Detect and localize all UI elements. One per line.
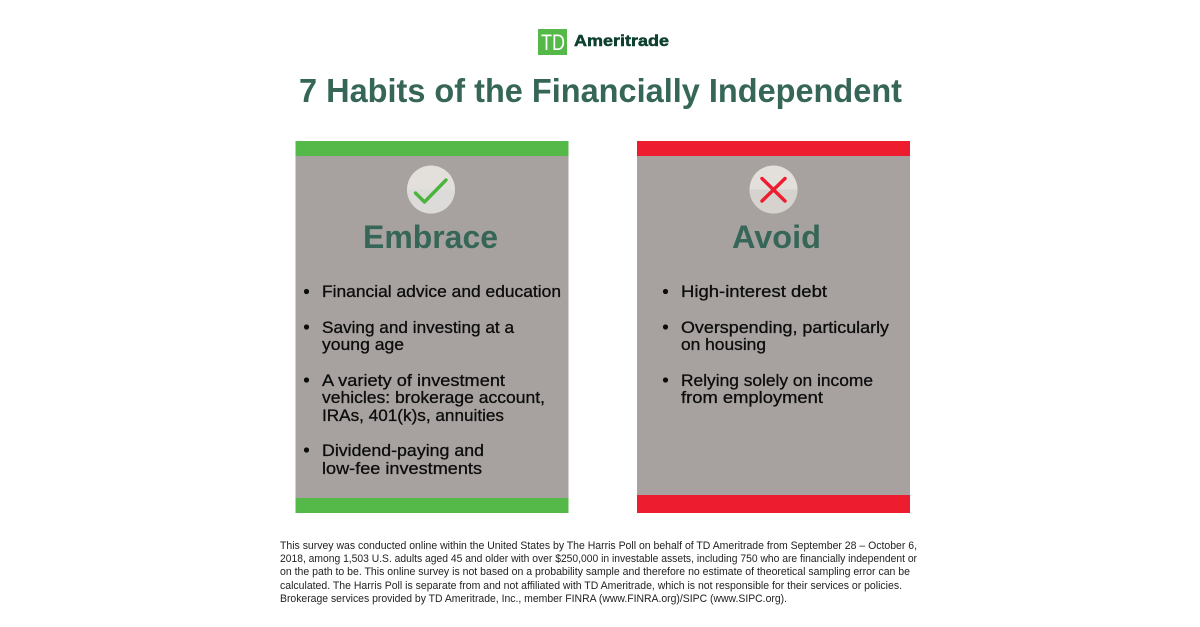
list: embrace items: Financial advice and education xyxy=(322,282,561,301)
list: embrace items: young age xyxy=(322,335,404,354)
list: avoid items: Overspending, particularly xyxy=(681,318,890,337)
panel: avoid xyxy=(637,141,910,513)
footnote: on the path to be. This online survey is not based on a probability sample and therefore no estimate of theoretical sampling error can be xyxy=(280,566,910,578)
heading: embrace: Embrace xyxy=(363,219,498,255)
logo: TD Ameritrade: TD xyxy=(541,30,565,55)
footnote: calculated. The Harris Poll is separate from and not affiliated with TD Ameritrade, which is not responsible for their services or policies. xyxy=(280,580,902,592)
footnote: Brokerage services provided by TD Ameritrade, Inc., member FINRA (www.FINRA.org)/SIPC (www.SIPC.org). xyxy=(280,593,787,605)
list: embrace items: A variety of investment xyxy=(322,371,505,390)
list: avoid items: Relying solely on income xyxy=(681,371,873,390)
icon: check mark xyxy=(407,166,455,214)
list: embrace items: IRAs, 401(k)s, annuities xyxy=(322,406,504,425)
list: embrace items: low-fee investments xyxy=(322,459,482,478)
list: avoid items: on housing xyxy=(681,335,766,354)
footnote: This survey was conducted online within the United States by The Harris Poll on behalf of TD Ameritrade from September 28 – October 6, xyxy=(280,540,917,552)
list: embrace items: vehicles: brokerage account, xyxy=(322,388,545,407)
panel: embrace xyxy=(296,141,568,513)
footnote: 2018, among 1,503 U.S. adults aged 45 and older with over $250,000 in investable assets, including 750 who are financially independent or xyxy=(280,553,917,565)
footnote xyxy=(280,540,917,605)
list: embrace items xyxy=(304,282,561,478)
list: avoid items: High-interest debt xyxy=(681,282,827,301)
list: avoid items xyxy=(663,282,890,407)
list: embrace items: Dividend-paying and xyxy=(322,441,484,460)
logo: TD Ameritrade: Ameritrade xyxy=(574,33,669,50)
heading: avoid: Avoid xyxy=(732,219,821,255)
list: embrace items: Saving and investing at a xyxy=(322,318,515,337)
logo: TD Ameritrade xyxy=(538,29,669,55)
list: avoid items: from employment xyxy=(681,388,823,407)
title: 7 Habits of the Financially Independent xyxy=(299,72,902,109)
icon: cross xyxy=(750,166,798,214)
